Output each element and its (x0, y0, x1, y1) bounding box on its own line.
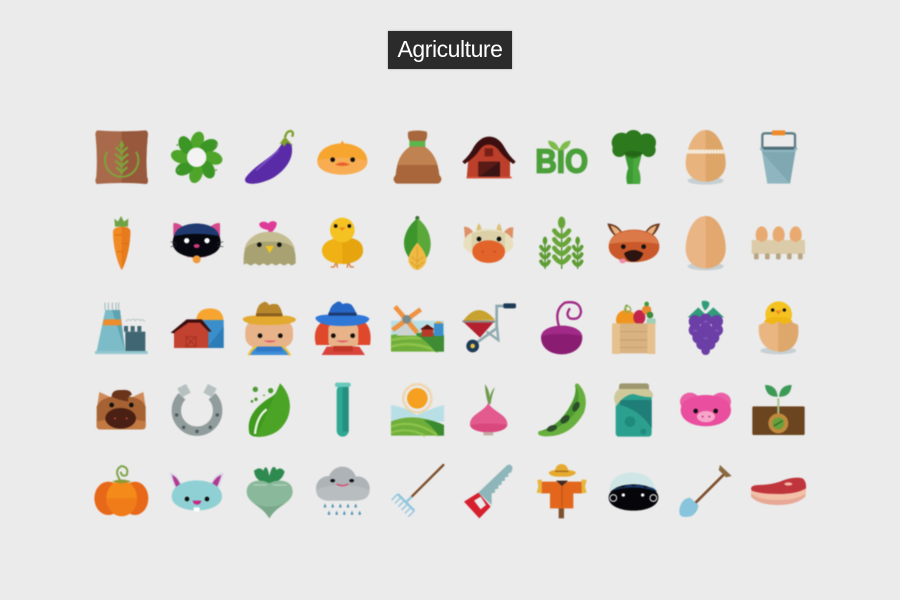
icon: horse face (97, 390, 146, 429)
icon: broccoli (612, 130, 656, 184)
icon: corn cob (404, 216, 431, 270)
icon: cow face (463, 223, 513, 263)
icon: horseshoe (175, 384, 219, 433)
icon: seed sack (95, 130, 148, 184)
icon: turnip (247, 467, 293, 518)
icon: rabbit face (169, 473, 224, 511)
row 1 left icons (95, 130, 441, 185)
title: Agriculture (398, 36, 502, 62)
icon: sprout in soil (752, 385, 805, 435)
icon: sheep face (609, 472, 658, 511)
icon: beetroot (541, 302, 582, 354)
icon: grain bag (394, 130, 441, 184)
icon: rain cloud (316, 467, 370, 515)
icon: dog face (607, 223, 660, 263)
row 3 right icons (462, 301, 805, 437)
row 3 left icons (95, 301, 444, 437)
icon: farmer with straw hat (243, 302, 296, 355)
icon: pickle jar (614, 383, 653, 437)
icon: cracked egg (686, 130, 726, 185)
icon: hen face (244, 221, 296, 266)
icon: yellow chick (322, 218, 363, 268)
icon: grapes (688, 301, 724, 355)
icon: hand saw (464, 465, 513, 518)
icon: onion (470, 384, 507, 435)
icon: windmill landscape (391, 307, 444, 352)
icon: wheat stalks (541, 217, 582, 268)
icon: test tube (335, 383, 351, 437)
icon: black cat face (171, 223, 223, 263)
icon: vegetable crate (612, 302, 656, 354)
icon: duck face (317, 141, 367, 175)
icon: shovel (679, 465, 732, 517)
icon: pea pod (538, 383, 586, 436)
icon: leaf wreath (169, 130, 224, 185)
icon: farmer girl with blue hat (315, 301, 371, 355)
row 5 right icons (464, 464, 806, 518)
icon: barn and silo (171, 308, 224, 348)
icon: wheelbarrow (462, 303, 516, 352)
icon: metal bucket (759, 130, 798, 184)
icon: steak (751, 478, 806, 505)
icon: chick hatching from egg (759, 301, 798, 354)
title (388, 31, 512, 69)
icon: eggplant (245, 131, 293, 184)
icon: BIO lettering: BIO (535, 144, 588, 181)
row 1 right icons (462, 130, 798, 185)
icon: brown egg (686, 216, 726, 270)
icon: pink pig face (680, 393, 731, 426)
icon: carrot (113, 216, 130, 270)
icon: red barn (462, 137, 516, 178)
icon: factory (95, 303, 148, 354)
row 5 left icons (94, 465, 443, 518)
row 2 left icons (113, 216, 431, 270)
row 2 right icons (463, 216, 805, 270)
icon: sun over fields (391, 384, 444, 436)
icon: egg tray (752, 226, 805, 259)
icon: scarecrow (537, 464, 587, 518)
icon: green leaf with dots (249, 383, 290, 437)
icon: garden rake (392, 465, 443, 517)
icon: pumpkin (94, 466, 148, 516)
